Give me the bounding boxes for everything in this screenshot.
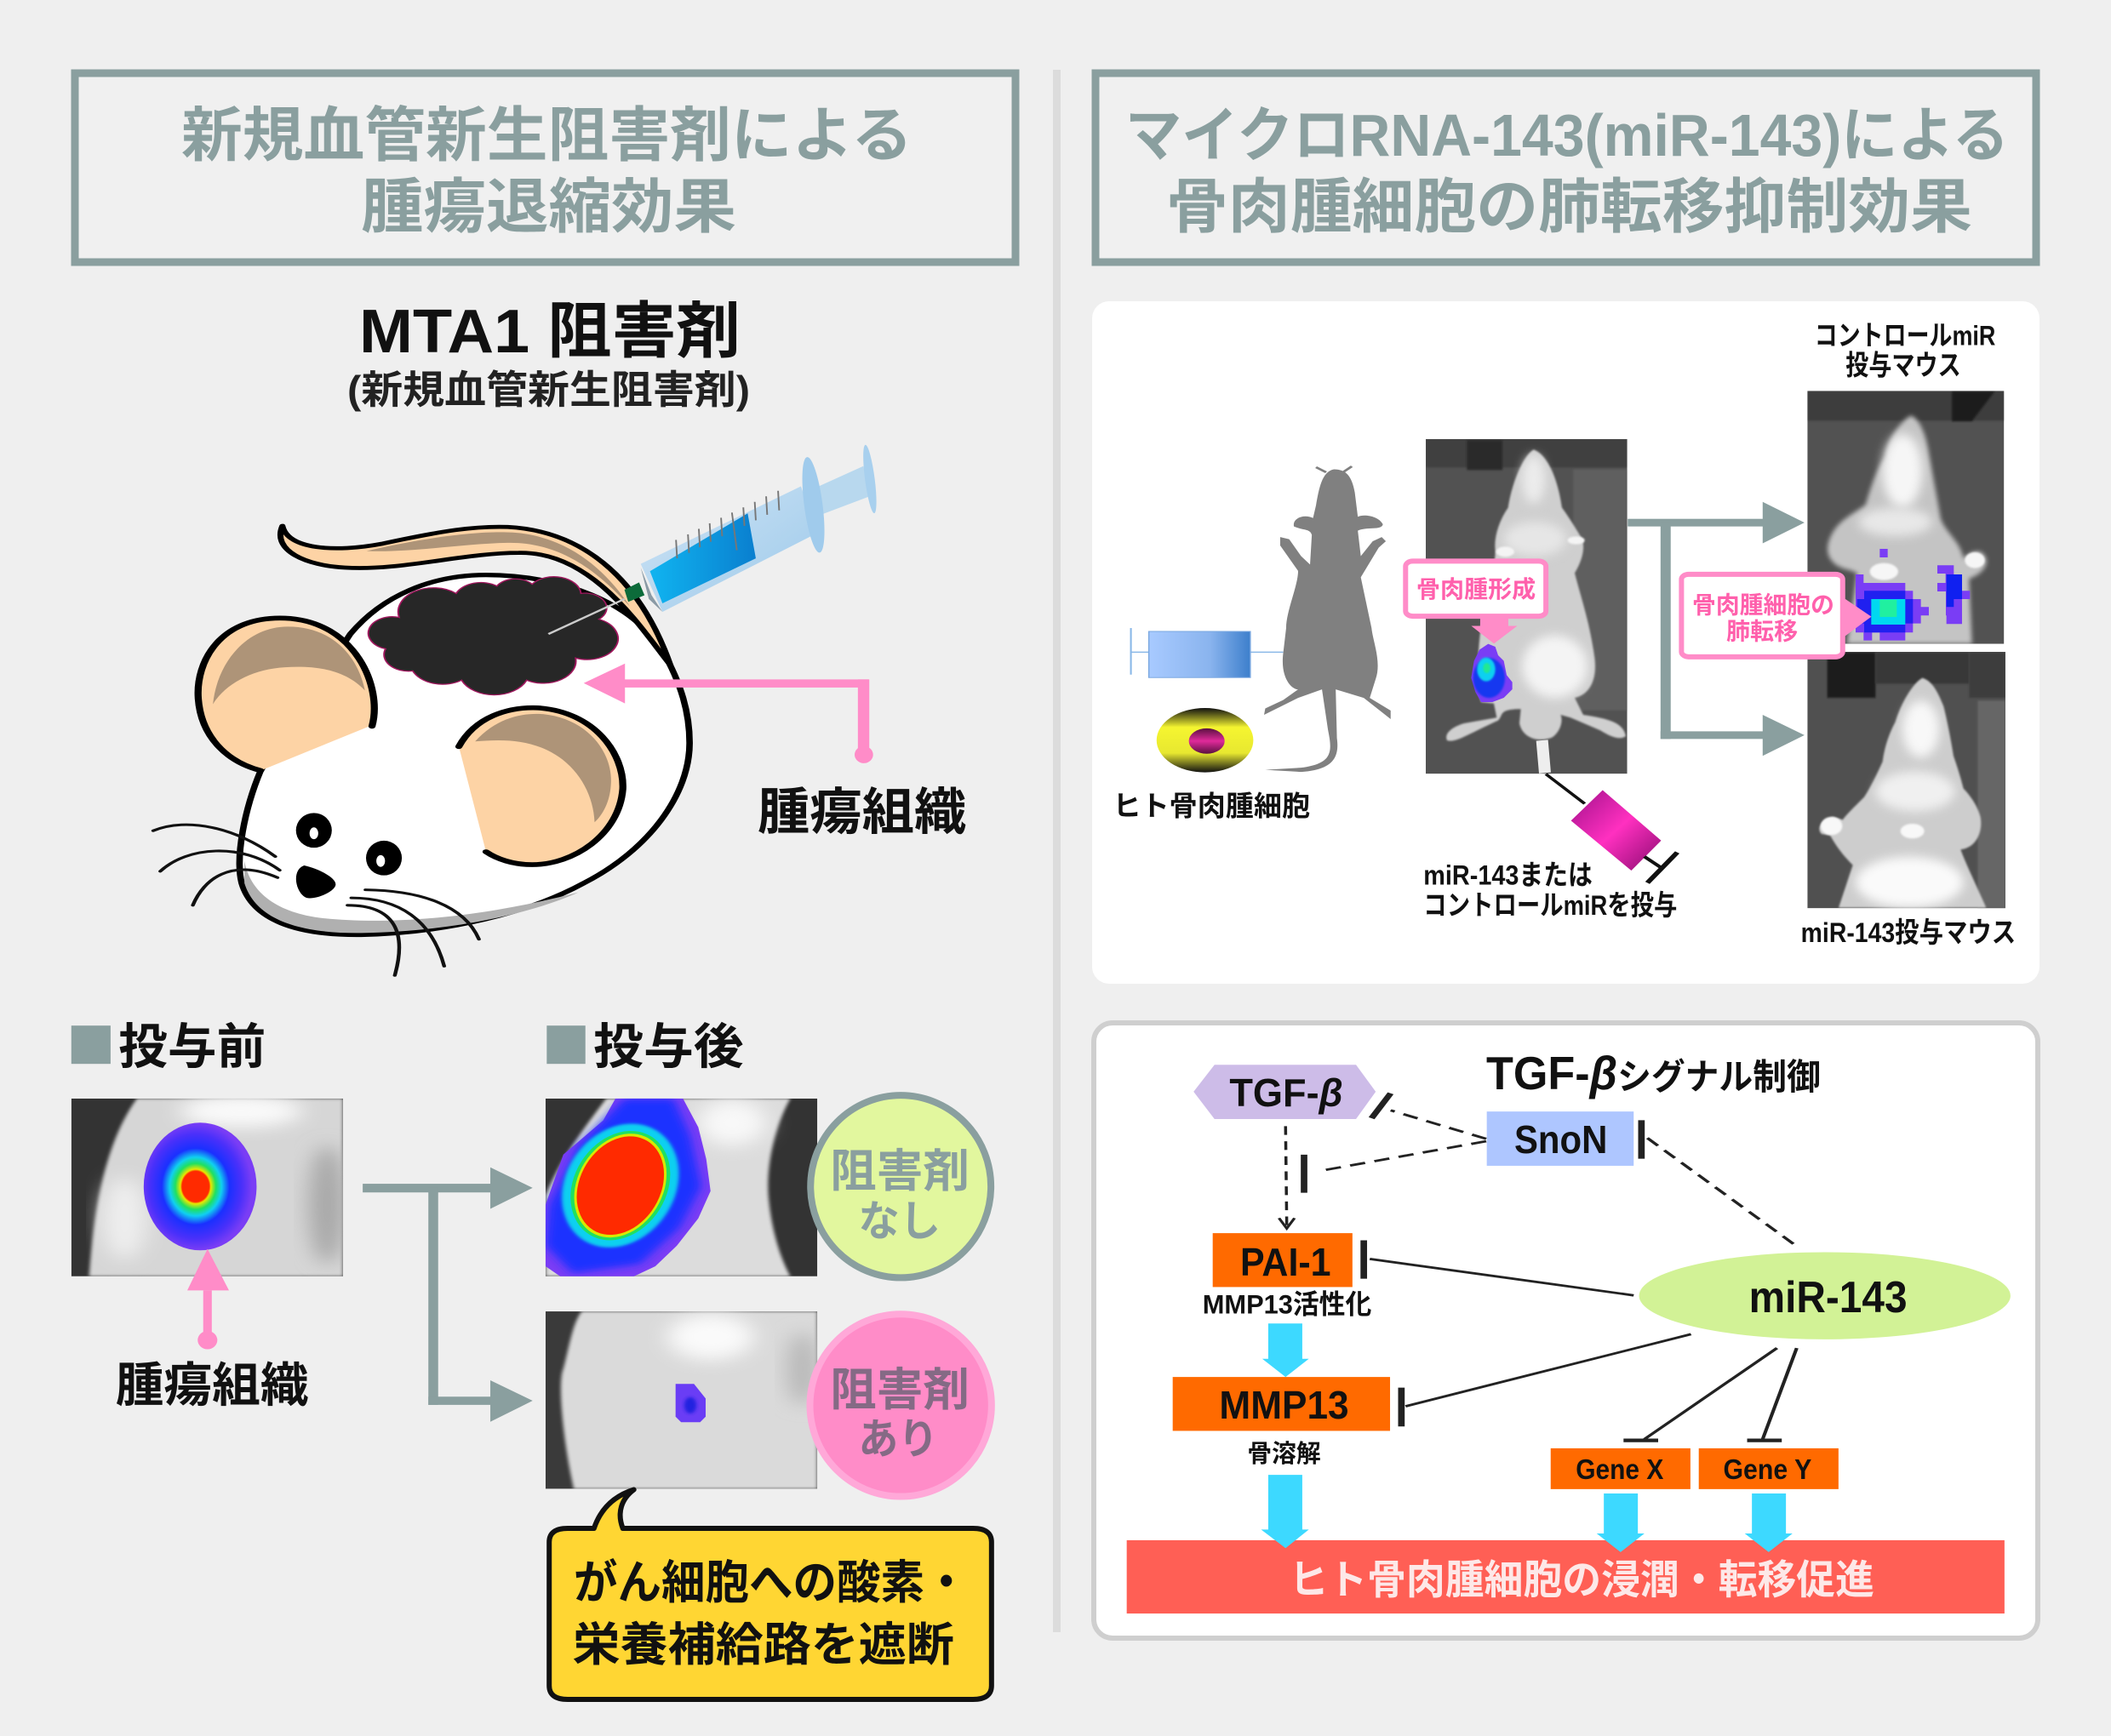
- arrow: branch to outcome mice: [1628, 502, 1805, 756]
- inhibition: SnoN dashed links: [1279, 1094, 1797, 1246]
- arrow: Gene X to invasion: [1597, 1493, 1645, 1552]
- label: MMP13 activation: MMP13活性化: [1203, 1289, 1371, 1320]
- panel: before and after imaging: [72, 1020, 992, 1699]
- arrow: MMP13 to invasion: [1261, 1475, 1309, 1548]
- label: tumour tissue: 腫瘍組織: [116, 1359, 309, 1412]
- image: mouse with primary tumour: [1426, 439, 1628, 774]
- node: miR-143: miR-143: [1749, 1273, 1908, 1322]
- node: Gene X: Gene X: [1576, 1453, 1664, 1486]
- subheading: MTA1 inhibitor: [347, 298, 750, 412]
- node: SnoN: [1487, 1111, 1633, 1166]
- tumour: [369, 577, 618, 695]
- icon: mouse silhouette: [1264, 466, 1391, 772]
- node: miR-143: [1639, 1252, 2011, 1339]
- nose: [296, 865, 335, 898]
- heading: TGF-beta signal control: TGF-βシグナル制御: [1486, 1047, 1821, 1099]
- node: MMP13: MMP13: [1219, 1383, 1349, 1427]
- image: before treatment: [72, 1095, 346, 1276]
- eyes: [296, 813, 402, 876]
- right ear: [459, 708, 623, 865]
- panel: TGF-beta signalling pathway: [1094, 1023, 2038, 1638]
- badge: no inhibitor: [810, 1095, 991, 1277]
- callout: blocks oxygen and nutrient supply: [549, 1490, 992, 1699]
- heading: left panel title: 新規血管新生阻害剤による: [181, 102, 912, 168]
- illustration: mouse with tumour and syringe: [153, 444, 966, 975]
- inhibition: miR-143 solid links: [1364, 1240, 1797, 1441]
- callout: blocks oxygen and nutrient supply: 栄養補給路を遮断: [573, 1619, 954, 1670]
- heading: right panel title: マイクロRNA-143(miR-143)による: [1125, 102, 2009, 168]
- label: lung metastasis: 骨肉腫細胞の: [1692, 592, 1834, 619]
- heading: before: 投与前: [118, 1020, 266, 1074]
- label: tumour tissue: 腫瘍組織: [758, 784, 966, 840]
- label: osteosarcoma formation: 骨肉腫形成: [1416, 577, 1536, 603]
- label: osteosarcoma formation: [1405, 561, 1546, 643]
- arrow: pink pointer to tumour: [584, 664, 873, 763]
- icon: tumour cell: [1157, 708, 1253, 773]
- badge: with inhibitor: 阻害剤: [830, 1365, 970, 1415]
- label: miR-143 or control administered: miR-143または: [1423, 859, 1593, 891]
- chin shadow: [244, 861, 578, 933]
- node: Gene Y: Gene Y: [1723, 1453, 1811, 1486]
- node: Gene X: [1551, 1448, 1691, 1489]
- badge: with inhibitor: あり: [858, 1416, 938, 1463]
- heading: left panel title: [75, 73, 1015, 262]
- image: after, no inhibitor: [545, 1099, 817, 1276]
- heading: left panel title: 腫瘍退縮効果: [361, 174, 736, 240]
- image: after, with inhibitor: [546, 1311, 818, 1488]
- heading: right panel title: [1096, 73, 2036, 262]
- label: miR-143 or control administered: [1423, 859, 1677, 921]
- arrow: Gene Y to invasion: [1745, 1493, 1793, 1552]
- label: lung metastasis: 肺転移: [1726, 619, 1798, 645]
- node: TGF-beta: TGF-β: [1229, 1071, 1343, 1115]
- left ear: [198, 618, 375, 771]
- mouse body: [239, 575, 689, 935]
- node: Gene Y: [1699, 1448, 1839, 1489]
- subheading: MTA1 inhibitor: MTA1 阻害剤: [359, 298, 741, 366]
- subheading: MTA1 inhibitor: (新規血管新生阻害剤): [347, 368, 750, 412]
- arrow: pink pointer to before tumour: [187, 1249, 229, 1350]
- label: bone resorption: 骨溶解: [1247, 1440, 1321, 1467]
- icon: magenta syringe: [1546, 774, 1677, 882]
- callout: blocks oxygen and nutrient supply: がん細胞への酸素・: [574, 1556, 968, 1608]
- label: human osteosarcoma cells: ヒト骨肉腫細胞: [1113, 791, 1310, 822]
- node: TGF-beta: [1193, 1065, 1376, 1119]
- arrow: branching treatment outcome: [363, 1168, 533, 1422]
- heading: after: [546, 1020, 744, 1074]
- whiskers: [153, 825, 479, 975]
- image: control miR mouse: [1807, 391, 2004, 644]
- heading: right panel title: 骨肉腫細胞の肺転移抑制効果: [1166, 174, 1972, 240]
- icon: blue syringe: [1131, 628, 1283, 677]
- badge: no inhibitor: 阻害剤: [830, 1146, 970, 1196]
- badge: no inhibitor: なし: [858, 1198, 941, 1245]
- label: control miR mouse: [1815, 320, 1995, 381]
- heading: after: 投与後: [593, 1020, 744, 1074]
- node: PAI-1: [1213, 1233, 1353, 1287]
- arrow: PAI-1 to MMP13: [1262, 1323, 1309, 1377]
- label: control miR mouse: 投与マウス: [1845, 350, 1961, 381]
- syringe: [548, 444, 879, 634]
- badge: with inhibitor: [810, 1314, 992, 1497]
- image: miR-143 mouse: [1807, 652, 2005, 908]
- bar: invasion and metastasis promotion: [1127, 1540, 2005, 1613]
- node: PAI-1: PAI-1: [1240, 1240, 1331, 1284]
- heading: before: [72, 1020, 266, 1074]
- label: miR-143 or control administered: コントロールmiRを投与: [1423, 889, 1677, 921]
- label: lung metastasis: [1681, 574, 1871, 657]
- tail: [280, 526, 671, 665]
- node: MMP13: [1173, 1377, 1390, 1430]
- panel: miR-143 lung metastasis experiment: [1092, 301, 2039, 984]
- node: SnoN: SnoN: [1514, 1117, 1607, 1162]
